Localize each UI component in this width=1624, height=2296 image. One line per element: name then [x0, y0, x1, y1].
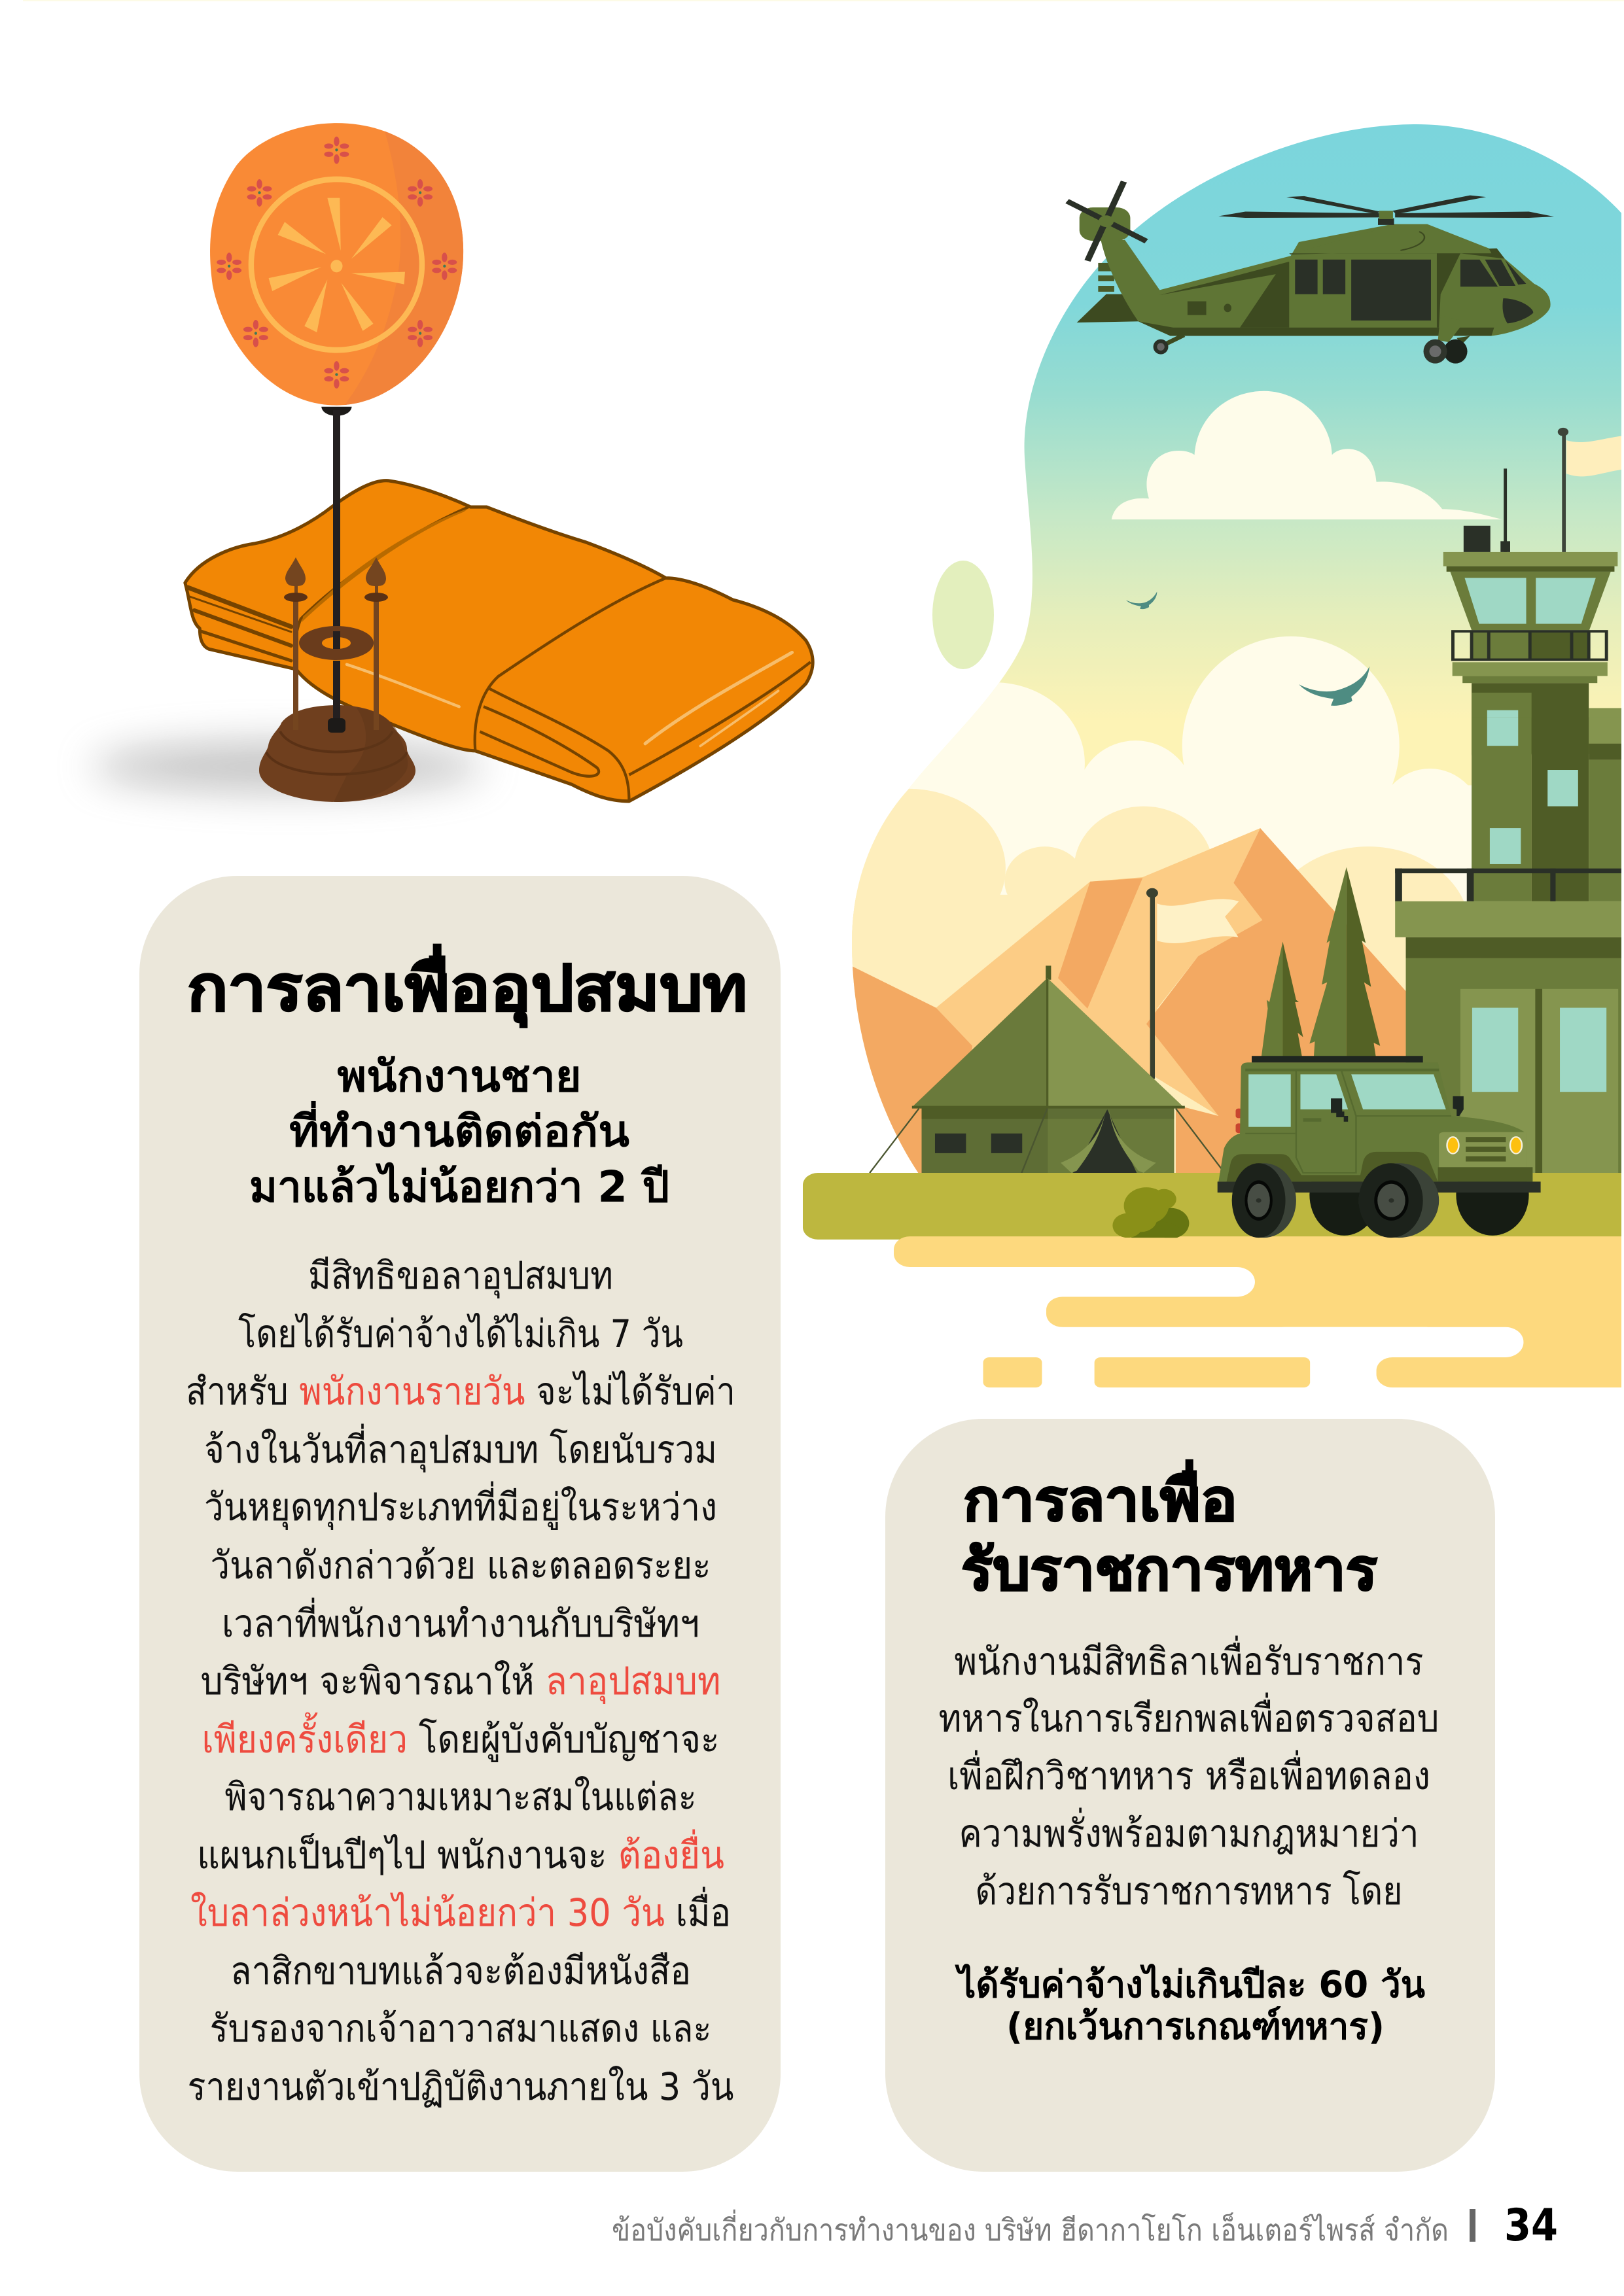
icon: helicopter: [1067, 182, 1554, 364]
flag and pole: [1146, 888, 1239, 1079]
footer: company text: ข้อบังคับเกี่ยวกับการทำงานของ บริษัท ฮีดากาโยโก เอ็นเตอร์ไพรส์ จำกัด: [612, 2209, 1449, 2248]
text block: ordination details: เพียงครั้งเดียว โดยผู้บังคับบัญชาจะ: [202, 1713, 720, 1762]
tent: [870, 965, 1221, 1173]
icon: birds: [1126, 592, 1369, 706]
sky blob background: [852, 124, 1624, 1177]
scene in lower coordinates: [803, 718, 1624, 1387]
small floating ellipse: [932, 561, 994, 669]
text block: ordination details: สำหรับ พนักงานรายวัน จะไม่ได้รับค่า: [186, 1369, 735, 1414]
text block: military leave details: เพื่อฝึกวิชาทหาร หรือเพื่อทดลอง: [947, 1750, 1430, 1798]
text block: ordination details: โดยได้รับค่าจ้างได้ไม่เกิน 7 วัน: [238, 1312, 683, 1356]
callout: paid days: (ยกเว้นการเกณฑ์ทหาร): [1006, 2006, 1385, 2048]
icon: ceremonial fan (talapat) with dharma wheel: [210, 123, 470, 416]
heading: military service leave: รับราชการทหาร: [961, 1536, 1377, 1603]
scenery clouds and mountains: [811, 636, 1483, 1175]
building: lower hall: [1395, 718, 1624, 1175]
cloud: upper cloud: [1112, 391, 1502, 519]
text block: ordination details: เวลาที่พนักงานทำงานกับบริษัทฯ: [222, 1597, 699, 1646]
subheading: eligibility: ที่ทำงานติดต่อกัน: [289, 1100, 629, 1157]
heading: ordination leave: การลาเพื่ออุปสมบท: [187, 944, 747, 1028]
robe left folds: [188, 587, 291, 661]
text block: ordination details: [186, 1253, 735, 2109]
text block: military leave details: [938, 1635, 1439, 1913]
subheading: eligibility: [249, 1051, 669, 1212]
callout: paid days: ได้รับค่าจ้างไม่เกินปีละ 60 วัน: [955, 1963, 1425, 2006]
ground strip: [803, 1173, 1624, 1240]
icon: military jeep: [1218, 1056, 1541, 1238]
icon: folded orange robe: [185, 481, 813, 801]
callout: paid days: [955, 1963, 1425, 2048]
text block: ordination details: มีสิทธิขอลาอุปสมบท: [308, 1253, 613, 1299]
panel: ordination leave: [139, 876, 781, 2172]
text block: ordination details: วันหยุดทุกประเภทที่มีอยู่ในระหว่าง: [204, 1481, 717, 1531]
footer divider: [1470, 2209, 1475, 2242]
pine trees: [1262, 867, 1380, 1057]
heading: military service leave: การลาเพื่อ: [963, 1460, 1237, 1534]
sand bands: [894, 1236, 1624, 1387]
text block: military leave details: ทหารในการเรียกพลเพื่อตรวจสอบ: [938, 1692, 1439, 1741]
icon: bush: [1112, 1187, 1189, 1243]
text block: ordination details: แผนกเป็นปีๆไป พนักงานจะ ต้องยื่น: [197, 1829, 724, 1877]
text block: ordination details: ใบลาล่วงหน้าไม่น้อยกว่า 30 วัน เมื่อ: [190, 1887, 731, 1935]
subheading: eligibility: มาแล้วไม่น้อยกว่า 2 ปี: [249, 1162, 669, 1212]
text block: ordination details: บริษัทฯ จะพิจารณาให้ ลาอุปสมบท: [200, 1659, 721, 1705]
text block: ordination details: วันลาดังกล่าวด้วย และตลอดระยะ: [211, 1543, 711, 1588]
text block: military leave details: ด้วยการรับราชการทหาร โดย: [975, 1869, 1403, 1913]
illustration: monk robe and ceremonial fan: [92, 123, 813, 802]
text block: military leave details: ความพรั่งพร้อมตามกฎหมายว่า: [959, 1807, 1419, 1856]
subheading: eligibility: พนักงานชาย: [338, 1051, 581, 1102]
heading: military service leave: [961, 1460, 1377, 1603]
text block: military leave details: พนักงานมีสิทธิลาเพื่อรับราชการ: [954, 1635, 1424, 1684]
text block: ordination details: พิจารณาความเหมาะสมในแต่ละ: [225, 1775, 696, 1819]
building: control tower: [1443, 428, 1624, 756]
text block: ordination details: จ้างในวันที่ลาอุปสมบท โดยนับรวม: [204, 1423, 717, 1473]
icon: fan stand with wooden base: [259, 410, 415, 802]
panel: military service leave: [885, 1419, 1495, 2172]
text block: ordination details: รับรองจากเจ้าอาวาสมาแสดง และ: [209, 2006, 712, 2051]
text block: ordination details: ลาสิกขาบทแล้วจะต้องมีหนังสือ: [230, 1949, 691, 1993]
illustration: military base scene: [803, 124, 1624, 1387]
page number: 34: [1504, 2200, 1558, 2252]
text block: ordination details: รายงานตัวเข้าปฏิบัติงานภายใน 3 วัน: [187, 2064, 734, 2109]
